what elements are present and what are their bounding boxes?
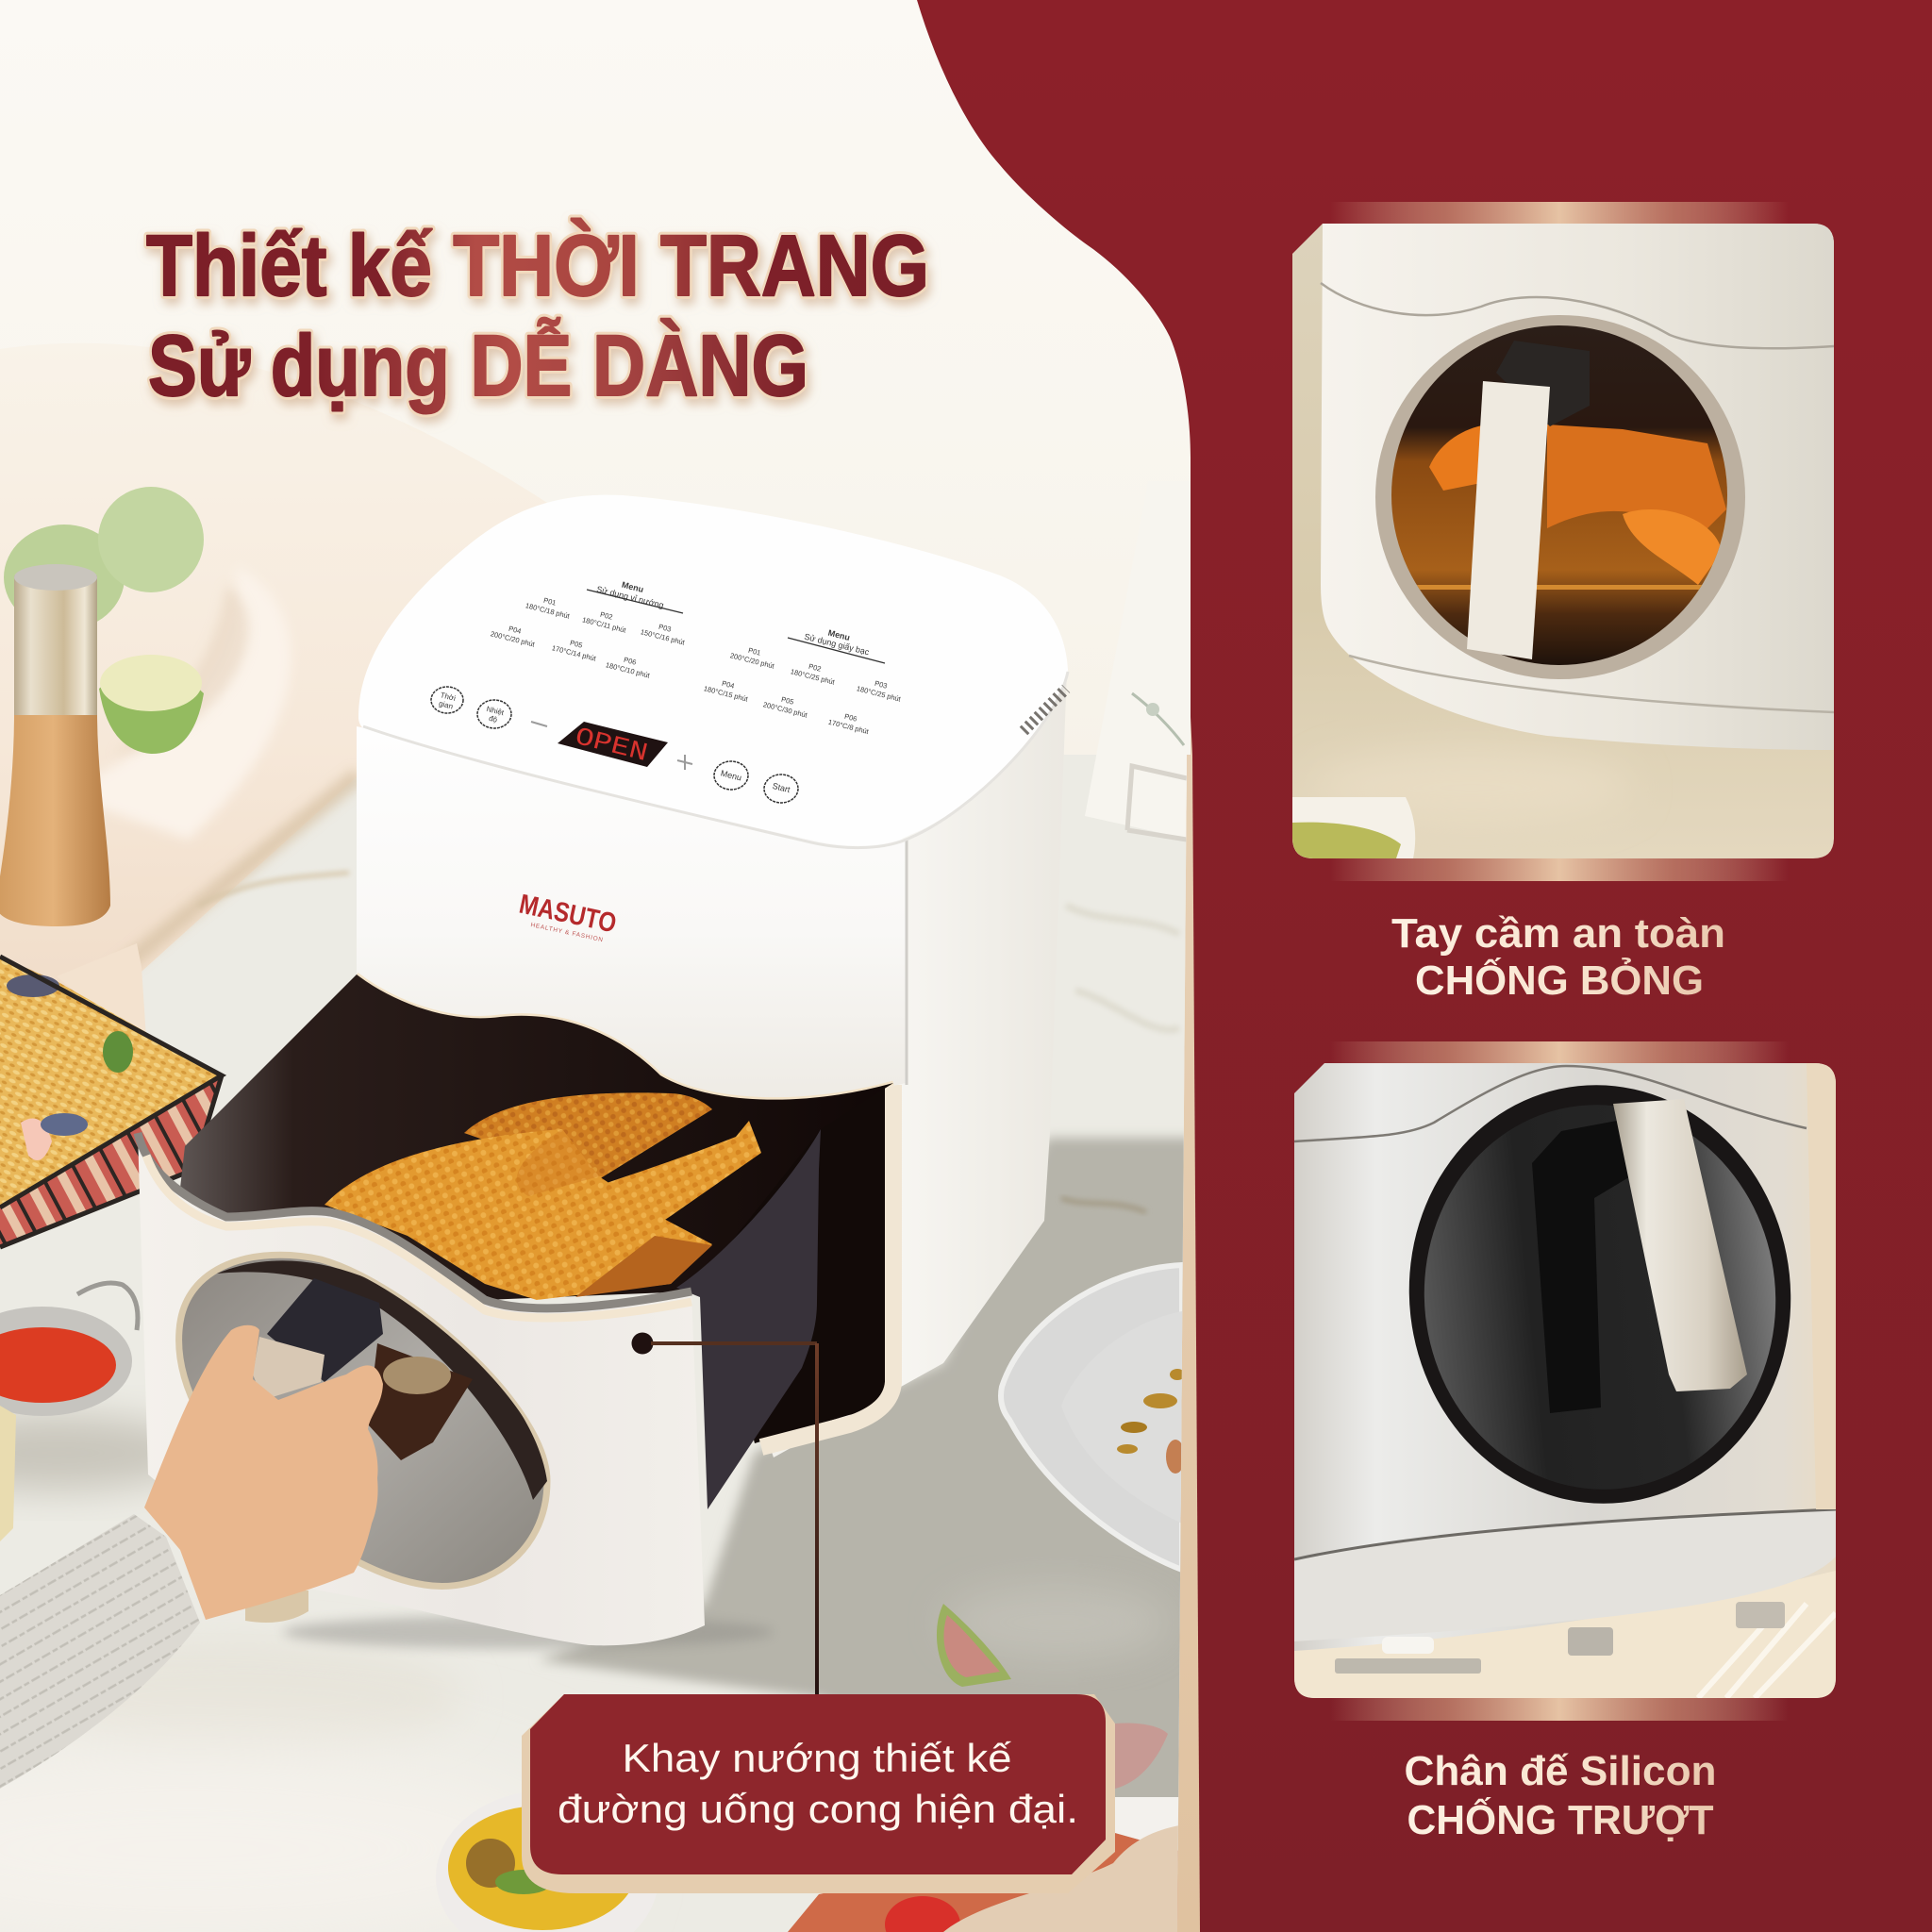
- limes: [4, 487, 204, 754]
- heading glow layer: Thiết kế THỜI TRANG: [146, 217, 929, 314]
- preset programmes: P05: [780, 695, 794, 707]
- basket interior: [179, 974, 893, 1300]
- preset programmes: 180°C/18 phút: [525, 601, 572, 621]
- control panel: [431, 575, 903, 803]
- heading line one: Thiết kế THỜI TRANG: [146, 217, 929, 314]
- glass cup: [0, 1406, 16, 1541]
- cream handle stem: [245, 1591, 308, 1623]
- side of unit: [759, 670, 1067, 1457]
- preset programmes: 180°C/11 phút: [581, 615, 627, 635]
- button labels: Start: [772, 781, 791, 794]
- callout box: đường uống cong hiện đại.: [558, 1787, 1078, 1831]
- menu text group two: Menu: [827, 628, 851, 642]
- button labels: Nhiệt: [486, 705, 506, 717]
- preset programmes: P06: [843, 712, 858, 724]
- basket dark side: [676, 1129, 821, 1509]
- button labels: độ: [488, 714, 499, 724]
- preset programmes: 170°C/8 phút: [827, 718, 871, 736]
- salt shaker: [0, 564, 110, 926]
- sauce dish: [0, 1283, 138, 1416]
- cream divider stripe: [1175, 717, 1200, 1932]
- knit sleeve: [0, 1514, 200, 1789]
- preset programmes: [490, 596, 903, 736]
- panel: safe handle: [1292, 202, 1834, 881]
- preset programmes: 180°C/25 phút: [790, 667, 837, 687]
- menu text group one: Menu: [621, 580, 644, 594]
- preset programmes: 200°C/20 phút: [729, 651, 776, 671]
- digital display: OPEN: [572, 724, 650, 769]
- menu text group two: Sử dụng giấy bạc: [804, 632, 871, 658]
- callout box: Khay nướng thiết kế: [623, 1736, 1011, 1780]
- digital display: [558, 722, 668, 769]
- preset programmes: 150°C/16 phút: [640, 627, 687, 647]
- button labels: Menu: [720, 768, 742, 783]
- button labels: Thời: [440, 691, 457, 703]
- preset programmes: 180°C/25 phút: [856, 684, 903, 704]
- caption: silicone base: CHỐNG TRƯỢT: [1407, 1795, 1714, 1843]
- preset programmes: P04: [508, 625, 522, 636]
- heading glow layer: Sử dụng DỄ DÀNG: [148, 316, 808, 414]
- photo: underside with feet: [1294, 1063, 1836, 1698]
- basket window: [179, 1255, 547, 1587]
- hand: [144, 1325, 383, 1620]
- pull-out basket front: [138, 1133, 705, 1645]
- heading glow layer: [146, 217, 929, 414]
- decorative top bar: [1330, 1041, 1789, 1063]
- preset programmes: P05: [569, 639, 583, 650]
- button labels: [438, 691, 791, 794]
- side plate: [1001, 1265, 1185, 1570]
- caption: safe handle: CHỐNG BỎNG: [1415, 956, 1704, 1004]
- preset programmes: 180°C/15 phút: [703, 684, 750, 704]
- photo scene: air fryer in kitchen: [0, 0, 1198, 1932]
- background wall and table: [0, 0, 1198, 1932]
- preset programmes: P01: [542, 596, 557, 608]
- lid: [358, 495, 1068, 845]
- preset programmes: 200°C/30 phút: [762, 700, 809, 720]
- air fryer main unit: [357, 495, 1068, 1457]
- picture frame: [1085, 692, 1187, 841]
- food basket: [0, 943, 222, 1247]
- preset programmes: P03: [658, 623, 672, 634]
- cutting board with pastry: [788, 1797, 1179, 1932]
- preset programmes: P06: [623, 656, 637, 667]
- vent slots: [1024, 689, 1066, 731]
- heading line two: Sử dụng DỄ DÀNG: [148, 316, 808, 414]
- plus and minus: [531, 722, 692, 770]
- air fryer body shadow: [283, 1615, 774, 1649]
- preset programmes: 200°C/20 phút: [490, 629, 537, 649]
- preset programmes: P02: [808, 662, 822, 674]
- preset programmes: 170°C/14 phút: [551, 643, 598, 663]
- caption: safe handle: [1391, 910, 1725, 1004]
- handle: [253, 1278, 383, 1400]
- brand logo: MASUTO: [517, 890, 619, 939]
- front body: [357, 726, 906, 1100]
- buttons: [431, 687, 798, 803]
- yellow sauce bowl: [448, 1807, 628, 1930]
- connector line: [632, 1332, 819, 1694]
- brand logo: HEALTHY & FASHION: [530, 922, 604, 943]
- callout box: [522, 1694, 1115, 1893]
- preset programmes: P02: [599, 610, 613, 622]
- button labels: gian: [438, 699, 454, 711]
- preset programmes: P03: [874, 679, 888, 691]
- preset programmes: P01: [747, 646, 761, 658]
- caption: silicone base: [1404, 1748, 1717, 1843]
- heading: [146, 217, 929, 414]
- preset programmes: P04: [721, 679, 735, 691]
- decorative bottom bar: [1330, 858, 1789, 881]
- menu text group one: Sử dụng vỉ nướng: [595, 584, 665, 610]
- roast chicken: [325, 1092, 761, 1300]
- decorative top bar: [1330, 202, 1789, 224]
- photo: glass window with handle: [1292, 224, 1834, 858]
- panel: silicone base: [1294, 1041, 1836, 1721]
- decorative bottom bar: [1330, 1698, 1789, 1721]
- preset programmes: 180°C/10 phút: [605, 660, 652, 680]
- caption: silicone base: Chân đế Silicon: [1404, 1748, 1717, 1794]
- fig slices: [937, 1604, 1168, 1789]
- cavity: [730, 1089, 885, 1443]
- caption: safe handle: Tay cầm an toàn: [1391, 910, 1725, 957]
- cavity trim: [761, 1085, 893, 1447]
